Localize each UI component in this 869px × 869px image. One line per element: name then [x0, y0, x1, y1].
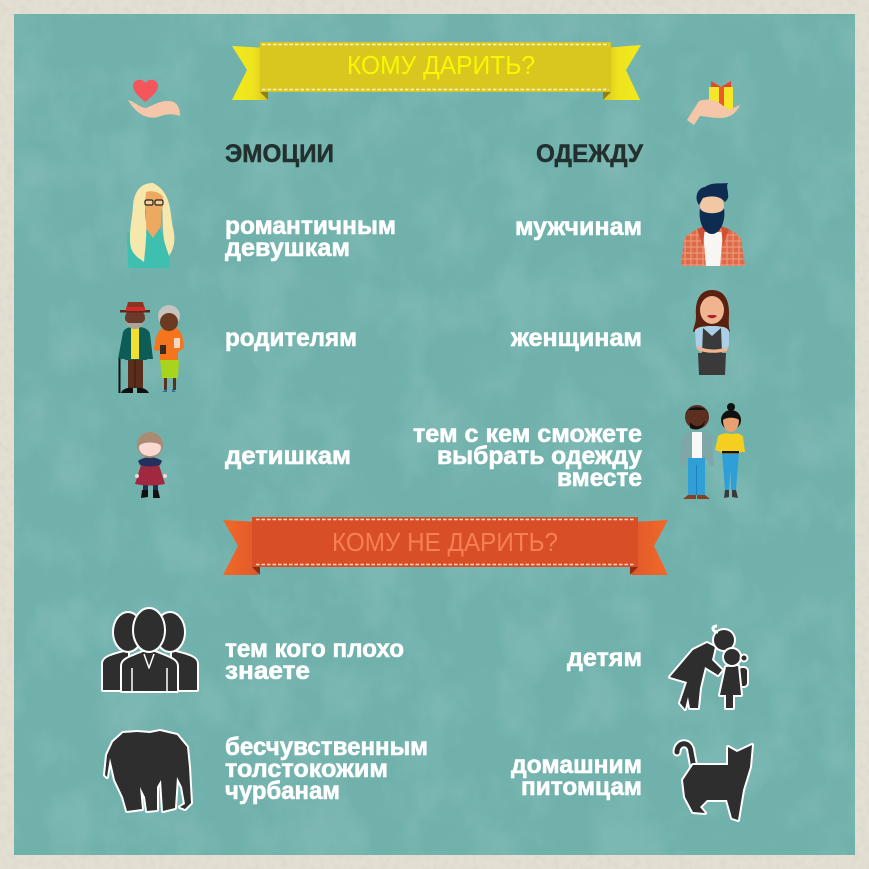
heading: emotions: ЭМОЦИИ	[225, 140, 334, 168]
person: little girl	[135, 432, 167, 498]
label: people you can choose clothes with	[413, 420, 642, 492]
banner: who to give	[232, 42, 641, 100]
label: people you can choose clothes with: вместе	[557, 464, 642, 492]
label: romantic girls: девушкам	[225, 234, 350, 262]
icon: hand with heart	[128, 80, 180, 118]
label: men: мужчинам	[515, 213, 642, 241]
banner title: КОМУ ДАРИТЬ?	[347, 50, 535, 80]
label: romantic girls	[225, 212, 396, 262]
icon: group of people	[103, 609, 197, 691]
label: parents: родителям	[225, 324, 357, 352]
label: thick-skinned boors: толстокожим	[225, 755, 388, 783]
heading: clothes: ОДЕЖДУ	[536, 140, 643, 168]
person: blonde girl	[127, 183, 174, 268]
icon: mother kissing child	[670, 626, 747, 709]
label: people you barely know	[225, 635, 404, 685]
label: people you barely know: знаете	[225, 657, 310, 685]
label: romantic girls: романтичным	[225, 212, 396, 240]
icon: cat	[677, 744, 752, 820]
person: bearded man	[681, 183, 745, 266]
icon: hand with gift	[687, 81, 740, 125]
label: people you can choose clothes with: выбрать одежду	[437, 442, 642, 470]
label: kids: детишкам	[225, 442, 351, 470]
banner: who not to give	[223, 517, 668, 575]
icon: elephant	[105, 731, 191, 811]
label: pets	[511, 751, 642, 801]
label: thick-skinned boors: чурбанам	[225, 777, 340, 805]
person: couple	[679, 403, 745, 499]
label: people you can choose clothes with: тем с кем сможете	[413, 420, 642, 448]
person: woman	[693, 290, 730, 375]
banner title: КОМУ НЕ ДАРИТЬ?	[332, 527, 558, 557]
label: women: женщинам	[510, 324, 642, 352]
label: people you barely know: тем кого плохо	[225, 635, 404, 663]
person: elderly couple	[118, 302, 184, 393]
label: thick-skinned boors: бесчувственным	[225, 733, 428, 761]
label: thick-skinned boors	[225, 733, 428, 805]
label: pets: домашним	[511, 751, 642, 779]
label: children: детям	[567, 644, 642, 672]
label: pets: питомцам	[521, 773, 642, 801]
